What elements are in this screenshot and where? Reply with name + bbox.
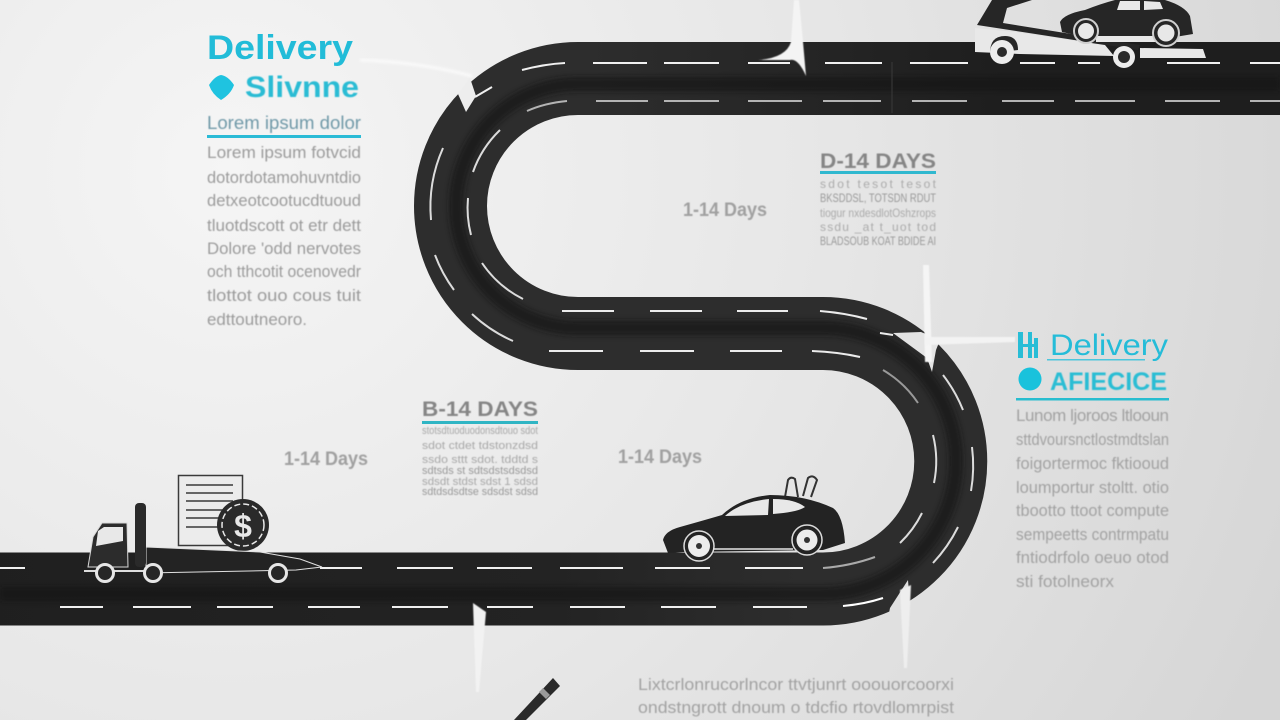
document: [178, 476, 242, 546]
panel: delivery info top-left: [207, 29, 361, 329]
panel: b-14 days lower-left: [284, 398, 539, 498]
icon: cyan circle: [1018, 368, 1042, 390]
lane dashes: top road inner: [527, 101, 1280, 111]
small body text: ssdu _at t_uot tod: [820, 220, 936, 234]
windows: [725, 499, 769, 516]
small body text: sdtdsdsdtse sdsdst sdsd: [422, 486, 538, 498]
text block: bottom caption: ondstngrott dnoum o tdcfio rtovdlomrpist: [638, 698, 954, 717]
lane dashes: bottom road: [0, 568, 807, 607]
label: days: 1-14 Days: [284, 449, 368, 470]
text block: bottom caption: [638, 675, 954, 717]
icon: pen at bottom: [514, 678, 560, 720]
small body text: stotsdtuoduodonsdtouo sdot: [422, 425, 538, 437]
text block: bottom caption: Lixtcrlonrucorlncor ttvtjunrt ooouorcoorxi: [638, 675, 954, 694]
body text: Lunom ljoroos ltlooun: [1016, 406, 1169, 425]
panel: delivery info right: [1016, 329, 1169, 591]
small body text: [820, 177, 937, 248]
icon: cyan glyph: [1018, 332, 1038, 358]
lane dashes: middle road: [549, 311, 893, 357]
body text: [207, 143, 361, 329]
road junction notches and callout leaders: [360, 0, 1015, 692]
lane dashes: right bend: [823, 370, 973, 606]
label: days: 1-14 Days: [683, 200, 767, 221]
body text: fntiodrfolo oeuo otod: [1016, 548, 1169, 567]
small body text: sdot ctdet tdstonzdsd: [422, 440, 538, 452]
rear wheel: [1113, 46, 1135, 68]
body text: tbootto ttoot compute: [1016, 501, 1169, 520]
panel: d-14 days top-centre: [683, 150, 937, 248]
body text: sempeetts contrmpatu: [1016, 525, 1169, 544]
heading: delivery: Delivery: [207, 29, 353, 67]
body text: tluotdscott ot etr dett: [207, 216, 361, 235]
truck wheels: [96, 564, 286, 582]
body text: och tthcotit ocenovedr: [207, 262, 361, 281]
body text: tlottot ouo cous tuit: [207, 286, 361, 305]
icon: tow truck carrying car, top right: [975, 0, 1206, 68]
body text: foigortermoc fktiooud: [1016, 454, 1169, 473]
body text: sti fotolneorx: [1016, 572, 1114, 591]
lane dashes: top road: [475, 63, 1280, 97]
small body text: sdsdt stdst sdst 1 sdsd: [422, 476, 538, 488]
front wheel: [990, 40, 1014, 64]
subheading: Lorem ipsum dolor: [207, 113, 361, 133]
lane dashes: left bend: [430, 130, 523, 341]
body text: Lorem ipsum fotvcid: [207, 143, 361, 162]
small body text: tiogur nxdesdlotOshzrops: [820, 206, 936, 220]
icon: flatbed truck with document and coin, lower left: [84, 476, 322, 582]
icon: car with luggage, lower centre: [663, 476, 845, 561]
body text: edttoutneoro.: [207, 310, 307, 329]
column: [135, 503, 146, 567]
luggage: [785, 476, 817, 497]
body text: sttdvoursnctlostmdtslan: [1016, 430, 1169, 449]
small body text: BKSDDSL, TOTSDN RDUT: [820, 191, 937, 205]
flatbed: [975, 28, 1114, 56]
small body text: [422, 425, 539, 498]
coin: [217, 499, 269, 551]
car body: [663, 495, 845, 553]
coin: $: [234, 508, 252, 544]
body text: dotordotamohuvntdio: [207, 168, 361, 187]
boom: [977, 0, 1140, 50]
body text: detxeotcootucdtuoud: [207, 191, 361, 210]
truck bed: [146, 547, 322, 573]
small body text: sdot tesot tesot: [820, 177, 937, 191]
heading: days: D-14 DAYS: [820, 150, 936, 173]
body text: loumportur stoltt. otio: [1016, 478, 1169, 497]
body text: [1016, 406, 1169, 591]
heading: second line: AFIECICE: [1050, 368, 1167, 396]
cab: [88, 523, 128, 567]
wheels: [684, 525, 822, 561]
body text: Dolore 'odd nervotes: [207, 239, 361, 258]
heading: days: B-14 DAYS: [422, 398, 538, 421]
label: days near car: 1-14 Days: [618, 447, 702, 468]
icon: cyan shield: [209, 75, 234, 100]
small body text: sdtsds st sdtsdstsdsdsd: [422, 465, 538, 477]
heading: second line: Slivnne: [245, 71, 359, 104]
small body text: ssdo sttt sdot. tddtd s: [422, 454, 539, 466]
heading: delivery: Delivery: [1050, 329, 1168, 362]
small body text: BLADSOUB KOAT BDIDE AI: [820, 234, 936, 248]
car on truck: [1060, 0, 1193, 46]
